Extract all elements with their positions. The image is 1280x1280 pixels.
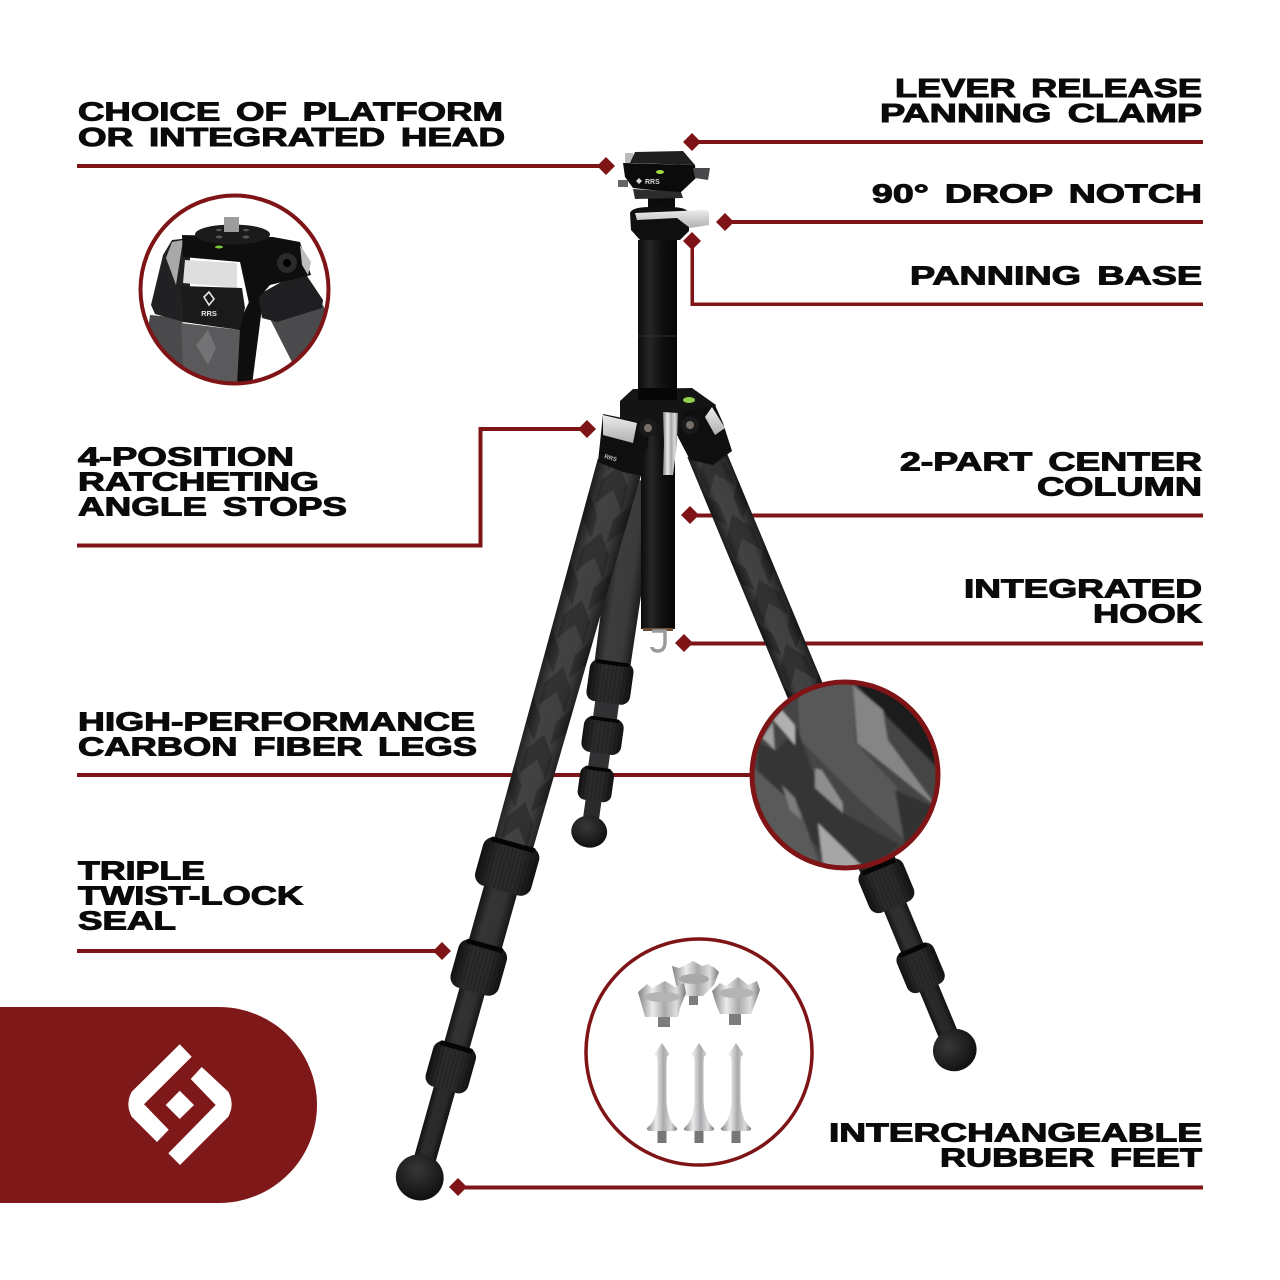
right collar bbox=[258, 276, 323, 322]
inset: platform head close-up bbox=[140, 196, 335, 385]
label: twist-lock seal bbox=[78, 856, 303, 936]
label: choice of platform bbox=[78, 96, 505, 152]
carbon legs bbox=[149, 315, 184, 366]
callout line: panning base bbox=[683, 232, 1203, 306]
label: ratcheting angle stops: 4-POSITION bbox=[78, 442, 294, 472]
tripod hub bbox=[598, 388, 732, 476]
spike foot 2 bbox=[684, 1043, 714, 1143]
label: twist-lock seal: TRIPLE bbox=[78, 856, 205, 886]
label: choice of platform: OR INTEGRATED HEAD bbox=[78, 122, 505, 152]
label: integrated hook bbox=[964, 574, 1202, 628]
label: rubber feet bbox=[829, 1118, 1202, 1172]
panning base bbox=[630, 197, 709, 240]
right leg bbox=[683, 441, 985, 1079]
label: lever release panning clamp: LEVER RELEASE bbox=[895, 73, 1202, 103]
label: carbon fiber legs: HIGH-PERFORMANCE bbox=[78, 706, 475, 736]
callout line: 90 degree drop notch bbox=[716, 213, 1203, 231]
inset: interchangeable feet bbox=[586, 939, 812, 1165]
silver latch bbox=[183, 260, 237, 288]
label: center column bbox=[900, 446, 1202, 502]
label: integrated hook: INTEGRATED bbox=[964, 574, 1202, 604]
callout line: twist-lock seal bbox=[77, 942, 451, 960]
leg lock lever bbox=[663, 412, 678, 475]
center column bbox=[638, 240, 677, 651]
right leg collar bbox=[678, 405, 732, 465]
brand mark on collar: RRS bbox=[603, 454, 617, 463]
label: carbon fiber legs bbox=[78, 706, 477, 762]
callout line: center column bbox=[681, 506, 1203, 524]
icon: brand mark bbox=[128, 1044, 232, 1165]
left collar bbox=[151, 238, 190, 322]
spike foot 1 bbox=[647, 1043, 677, 1143]
left leg collar bbox=[598, 414, 649, 476]
label: ratcheting angle stops: ANGLE STOPS bbox=[78, 492, 347, 522]
label: lever release panning clamp: PANNING CLAMP bbox=[880, 98, 1202, 128]
label: rubber feet: INTERCHANGEABLE bbox=[829, 1118, 1202, 1148]
label: 90 degree drop notch: 90° DROP NOTCH bbox=[872, 178, 1202, 208]
label: carbon fiber legs: CARBON FIBER LEGS bbox=[78, 732, 477, 762]
top hub bbox=[182, 235, 311, 308]
label: lever release panning clamp bbox=[880, 73, 1202, 128]
crown foot: left bbox=[638, 981, 686, 1027]
label: twist-lock seal: TWIST-LOCK bbox=[78, 880, 303, 910]
label: integrated hook: HOOK bbox=[1093, 598, 1202, 628]
logo badge bbox=[0, 1007, 317, 1203]
label: choice of platform: CHOICE OF PLATFORM bbox=[78, 96, 503, 126]
tripod bbox=[386, 151, 985, 1207]
label: ratcheting angle stops bbox=[78, 442, 347, 522]
callout line: integrated hook bbox=[675, 634, 1203, 652]
hook bbox=[652, 631, 665, 651]
callout line: carbon fiber legs bbox=[77, 773, 757, 777]
lever release panning clamp bbox=[618, 151, 710, 199]
lever release panning clamp: RRS bbox=[645, 179, 660, 186]
label: twist-lock seal: SEAL bbox=[78, 906, 176, 936]
callout line: choice of platform bbox=[77, 157, 615, 175]
callout line: rubber feet bbox=[449, 1178, 1203, 1196]
callout line: ratcheting angle stops bbox=[77, 420, 596, 548]
front collar bbox=[182, 286, 245, 330]
left leg bbox=[386, 457, 648, 1207]
back leg bbox=[565, 477, 660, 851]
inset: carbon fiber close-up bbox=[752, 680, 940, 868]
crown foot: right bbox=[712, 977, 760, 1025]
silver lever bbox=[635, 210, 709, 228]
callout line: lever release panning clamp bbox=[683, 133, 1203, 151]
label: rubber feet: RUBBER FEET bbox=[940, 1142, 1202, 1172]
label: center column: COLUMN bbox=[1037, 472, 1202, 502]
label: ratcheting angle stops: RATCHETING bbox=[78, 466, 319, 496]
inset: platform head close-up: RRS bbox=[201, 309, 217, 318]
spike foot 3 bbox=[721, 1043, 751, 1143]
label: center column: 2-PART CENTER bbox=[900, 446, 1202, 476]
crown foot: back bbox=[672, 961, 719, 1005]
label: panning base: PANNING BASE bbox=[910, 260, 1202, 290]
